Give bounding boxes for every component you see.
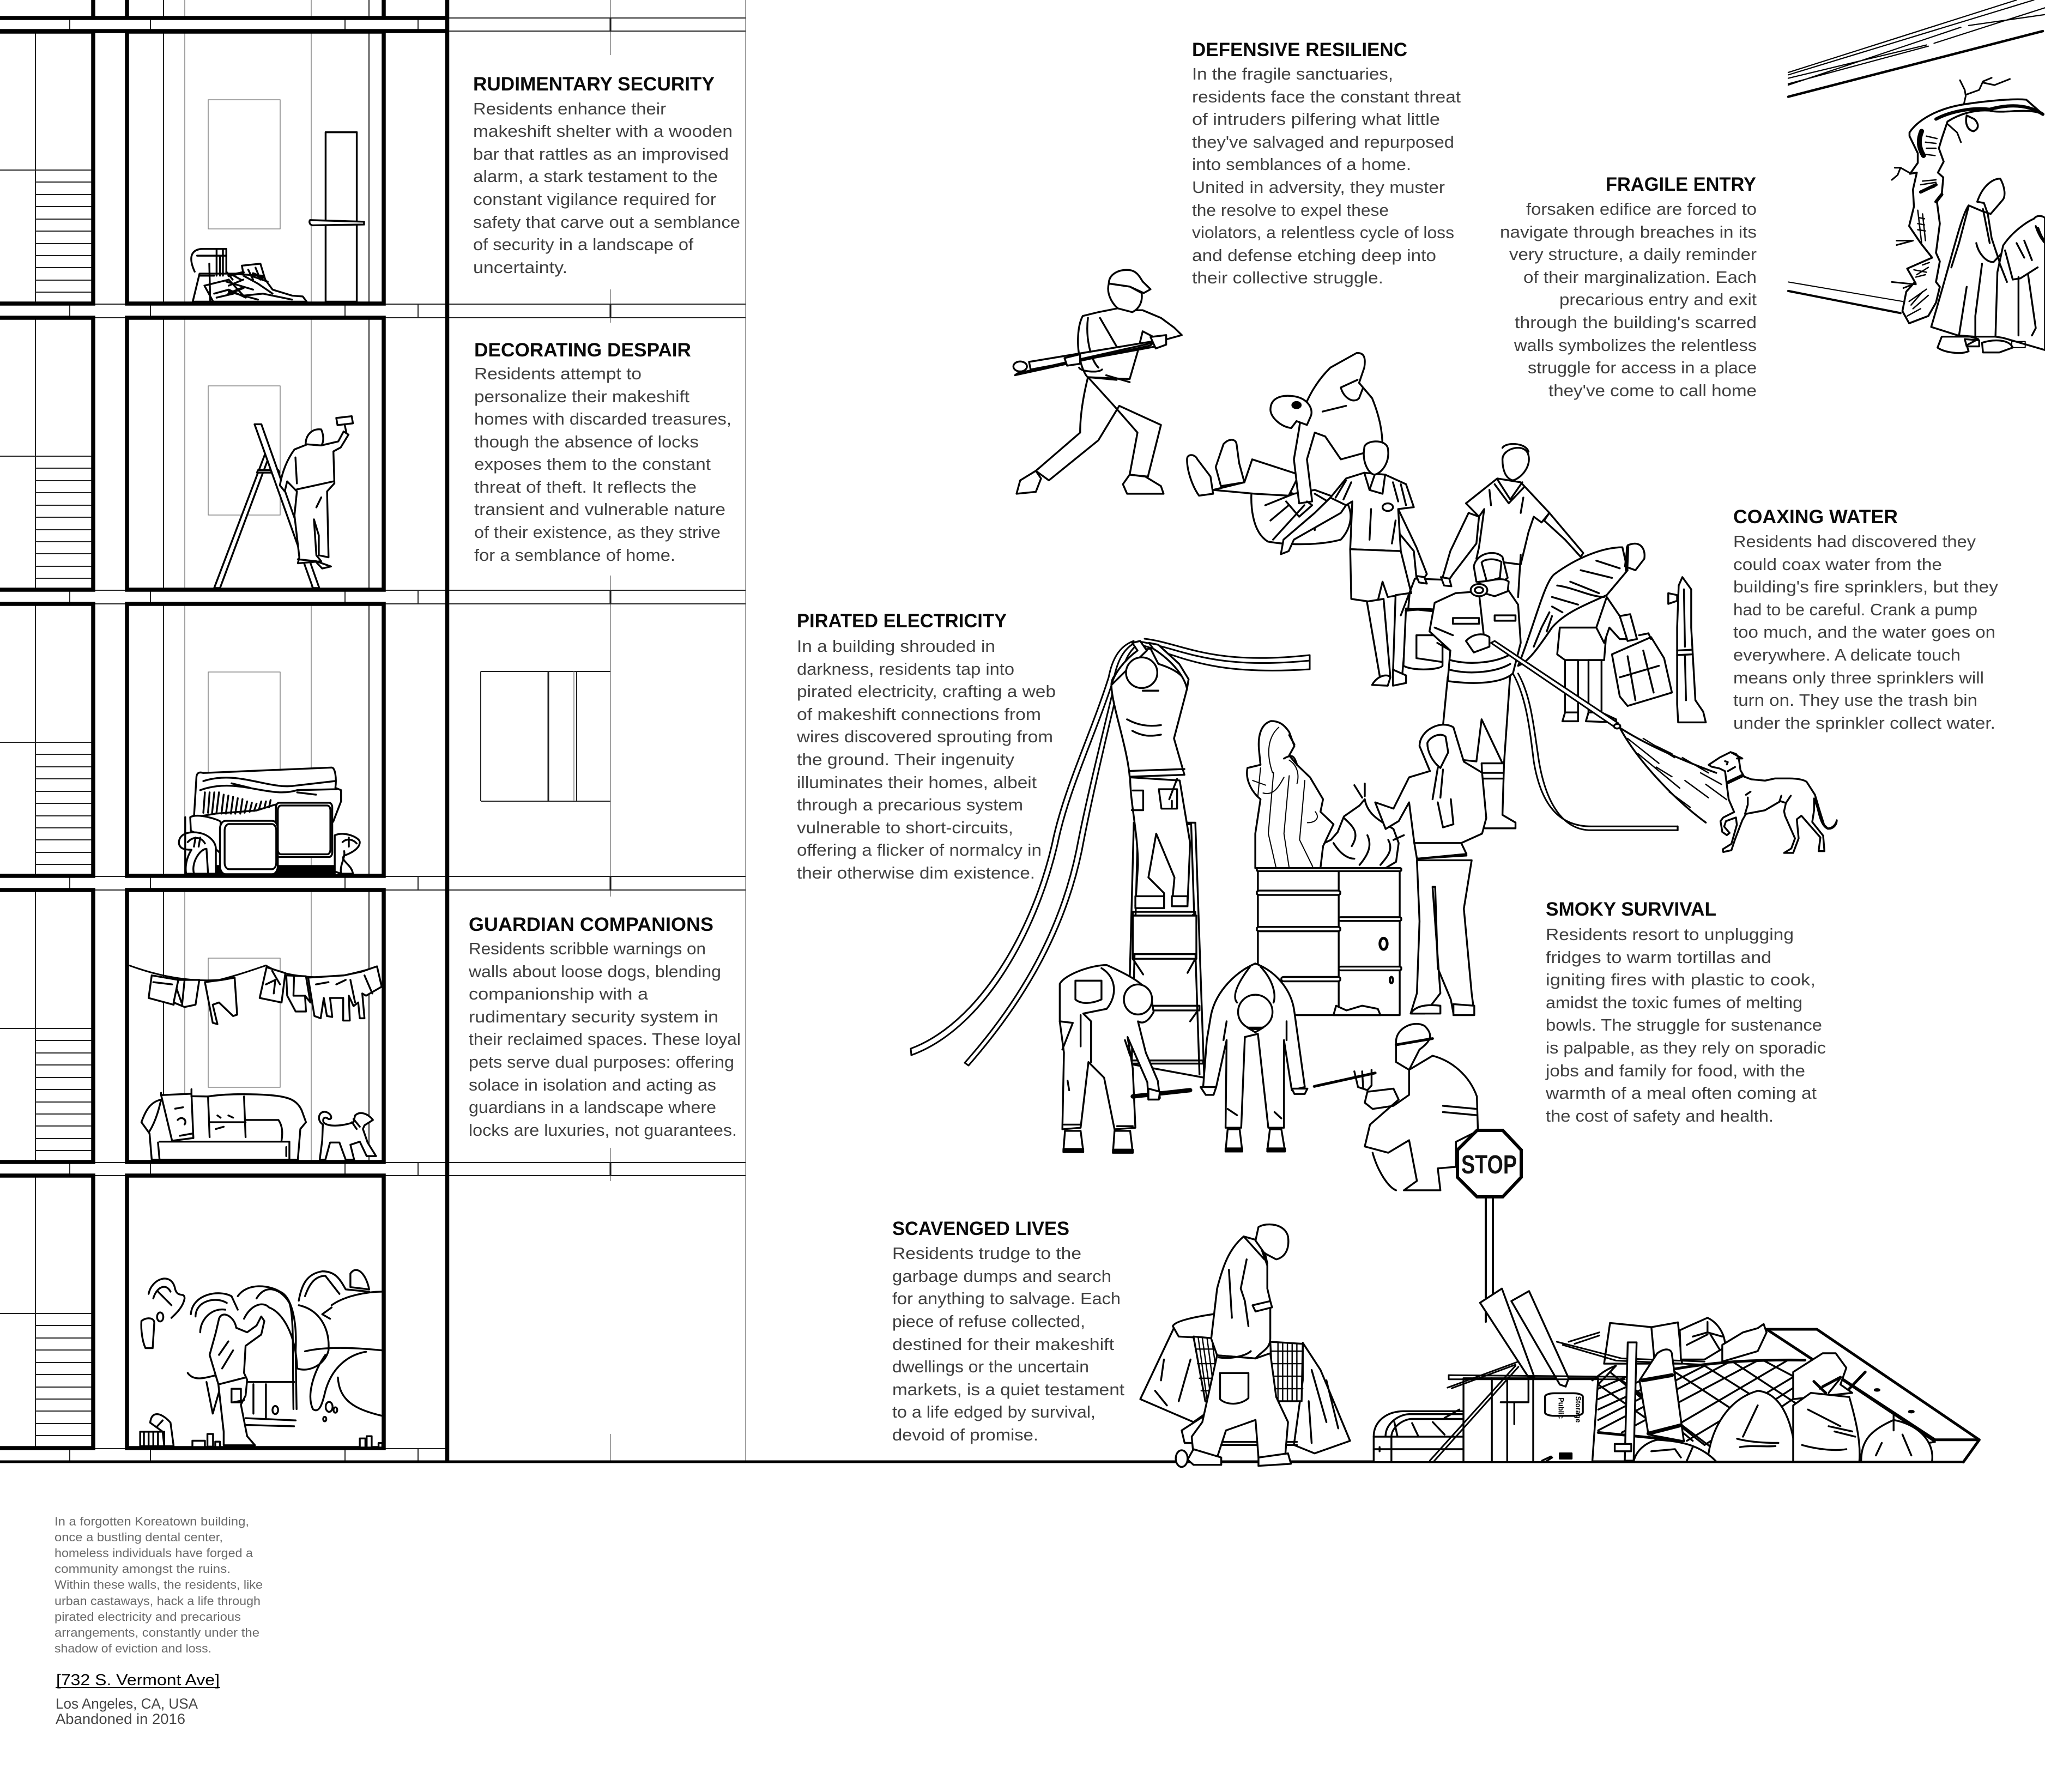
room 4: clothesline, sofa and dog (129, 965, 382, 1160)
heading: scavenged lives: SCAVENGED LIVES (892, 1218, 1069, 1239)
icon: pipes and paper (1557, 1318, 1766, 1365)
text block: pirated electricity: through a precarious system (797, 795, 1023, 814)
heading: guardian companions: GUARDIAN COMPANIONS (469, 914, 713, 935)
icon: chair and junk pile (191, 249, 307, 301)
text block: pirated electricity (796, 637, 1056, 882)
room 3: armchair, mattress and televisions (179, 767, 360, 875)
text block: decorating despair: threat of theft. It reflects the (474, 477, 697, 497)
text block: rudimentary security: makeshift shelter with a wooden (473, 122, 733, 141)
icon: crack in wall (1892, 78, 2043, 323)
intro paragraph: urban castaways, hack a life through (55, 1594, 261, 1608)
person in v-neck helping with bucket (1443, 444, 1583, 597)
text block: decorating despair (474, 364, 731, 565)
text block: coaxing water: Residents had discovered they (1733, 532, 1976, 551)
intro paragraph: arrangements, constantly under the (55, 1626, 259, 1639)
text block: coaxing water: under the sprinkler collect water. (1733, 713, 1995, 732)
text block: fragile entry: struggle for access in a place (1528, 358, 1757, 377)
icon: suitcase (1374, 1409, 1507, 1462)
top right: broken wall and figures (1788, 0, 2045, 353)
standpipe (1668, 577, 1706, 722)
electrician (1130, 777, 1190, 908)
text block: smoky survival: igniting fires with plastic to cook, (1546, 970, 1816, 989)
person pushing shopping cart with bags (1140, 1225, 1350, 1467)
text block: decorating despair: exposes them to the constant (474, 455, 711, 474)
text block: scavenged lives: dwellings or the uncertain (892, 1357, 1089, 1376)
text block: scavenged lives: markets, is a quiet testament (892, 1380, 1124, 1399)
text block: defensive resilience: United in adversity, they muster (1192, 178, 1445, 197)
icon: garbage bags (1633, 1353, 1932, 1462)
icon: left garbage bag (1140, 1313, 1217, 1422)
text block: fragile entry (1500, 199, 1757, 400)
text block: defensive resilience: their collective struggle. (1192, 268, 1383, 287)
text block: pirated electricity: the ground. Their ingenuity (797, 750, 1015, 769)
text block: pirated electricity: offering a flicker of normalcy in (797, 840, 1042, 859)
heading: pirated electricity: PIRATED ELECTRICITY (797, 610, 1007, 632)
location and status (56, 1696, 198, 1727)
intro paragraph (55, 1515, 263, 1655)
text block: rudimentary security (473, 99, 740, 277)
text block: defensive resilience: into semblances of a home. (1192, 155, 1411, 174)
person carrying bucket in polo shirt (1281, 441, 1427, 686)
text block: pirated electricity: pirated electricity, crafting a web (797, 682, 1056, 701)
text block: guardian companions: guardians in a landscape where (469, 1098, 716, 1117)
text block: scavenged lives: piece of refuse collected, (892, 1312, 1085, 1331)
text block: scavenged lives: for anything to salvage. Each (892, 1289, 1121, 1308)
heading: decorating despair: DECORATING DESPAIR (474, 340, 691, 361)
pressure wand and water spray (1466, 634, 1727, 822)
text block: defensive resilience: of intruders pilfering what little (1192, 110, 1440, 129)
text block: decorating despair: for a semblance of home. (474, 546, 675, 565)
intro paragraph: In a forgotten Koreatown building, (55, 1515, 249, 1528)
text block: scavenged lives: garbage dumps and search (892, 1267, 1111, 1286)
fallen man's legs and torso (1187, 440, 1351, 544)
intro paragraph: community amongst the ruins. (55, 1562, 231, 1576)
text block: coaxing water: turn on. They use the trash bin (1733, 691, 1977, 710)
text block: rudimentary security: Residents enhance their (473, 99, 666, 118)
text block: pirated electricity: In a building shrouded in (797, 637, 995, 656)
bent worker one with backpack (1060, 965, 1190, 1153)
text block: pirated electricity: wires discovered sprouting from (796, 727, 1053, 746)
text block: coaxing water: building's fire sprinklers, but they (1733, 577, 1999, 596)
icon: first robed figure (1931, 179, 2032, 353)
icon: door (325, 132, 357, 301)
text block: guardian companions: solace in isolation and acting as (469, 1075, 716, 1094)
text block: scavenged lives: Residents trudge to the (892, 1244, 1081, 1263)
icon: graffiti artist (210, 1315, 264, 1445)
intro paragraph: shadow of eviction and loss. (55, 1642, 211, 1655)
ground line (0, 1461, 1963, 1463)
text block: fragile entry: navigate through breaches in its (1500, 222, 1757, 241)
text block: scavenged lives: devoid of promise. (892, 1425, 1038, 1444)
text block: pirated electricity: darkness, residents tap into (797, 659, 1014, 679)
icon: chain-link net (1592, 1342, 1805, 1461)
heading: rudimentary security: RUDIMENTARY SECURITY (473, 74, 715, 95)
swinging man with bar (1013, 270, 1182, 494)
text block: pirated electricity: their otherwise dim existence. (797, 863, 1035, 882)
text block: smoky survival: amidst the toxic fumes of melting (1546, 993, 1802, 1012)
text block: rudimentary security: safety that carve out a semblance (473, 213, 740, 232)
room 1: door with wooden bar and junk pile (191, 132, 364, 301)
text block: rudimentary security: uncertainty. (473, 258, 567, 277)
text block: fragile entry: walls symbolizes the relentless (1514, 336, 1757, 355)
crouching worker with fork and face shield (1314, 1024, 1478, 1190)
text block: defensive resilience: residents face the constant threat (1192, 87, 1461, 106)
text block: coaxing water: too much, and the water goes on (1733, 622, 1995, 641)
text block: coaxing water: had to be careful. Crank a pump (1733, 600, 1977, 619)
text block: pirated electricity: illuminates their homes, albeit (797, 773, 1037, 792)
icon: clothesline with laundry (129, 965, 382, 1024)
text block: guardian companions: Residents scribble warnings on (469, 939, 706, 958)
text block: defensive resilience: violators, a relentless cycle of loss (1192, 223, 1454, 242)
text block: coaxing water: could coax water from the (1733, 555, 1942, 574)
text block: coaxing water: means only three sprinklers will (1733, 668, 1984, 687)
text block: rudimentary security: bar that rattles as an improvised (473, 144, 729, 164)
icon: shopper (1188, 1225, 1291, 1466)
person in hoodie warming hands (1375, 725, 1486, 1015)
text block: rudimentary security: constant vigilance required for (473, 190, 716, 209)
text block: guardian companions: locks are luxuries, not guarantees. (469, 1121, 737, 1140)
text block: fragile entry: precarious entry and exit (1559, 290, 1757, 309)
standing attacker leaning over (1270, 353, 1383, 517)
text block: decorating despair: transient and vulnerable nature (474, 500, 725, 519)
heading: defensive resilience: DEFENSIVE RESILIENC (1192, 39, 1407, 60)
stop sign (1457, 1130, 1521, 1322)
text block: scavenged lives (892, 1244, 1124, 1444)
wall perspective lines (1788, 0, 2045, 313)
wires (911, 639, 1310, 1065)
text block: defensive resilience: In the fragile sanctuaries, (1192, 64, 1393, 83)
text block: guardian companions (468, 939, 741, 1140)
icon: sofa (141, 1089, 306, 1160)
text block: smoky survival: fridges to warm tortillas and (1546, 948, 1771, 967)
text block: fragile entry: very structure, a daily reminder (1509, 245, 1757, 264)
burn barrels with fire (1257, 784, 1404, 1015)
falling man being pushed (1187, 353, 1383, 544)
text block: guardian companions: their reclaimed spaces. These loyal (469, 1030, 741, 1049)
icon: cardboard box with Public Storage label: Public (1557, 1397, 1565, 1419)
greyhound dog (1709, 752, 1837, 853)
icon: flames (1318, 784, 1404, 868)
icon: paint cans and supplies (140, 1414, 382, 1448)
icon: wooden security bar (310, 220, 364, 225)
bending woman with shawl carrying jug (1518, 544, 1672, 722)
icon: cardboard box with Public Storage label: Storage (1574, 1396, 1582, 1422)
scrap heap (1374, 1288, 1979, 1462)
intro paragraph: homeless individuals have forged a (55, 1546, 253, 1560)
icon: shopping cart (1176, 1336, 1303, 1467)
intro paragraph: pirated electricity and precarious (55, 1610, 241, 1624)
text block: smoky survival: jobs and family for food, with the (1545, 1061, 1805, 1080)
location and status: Abandoned in 2016 (56, 1711, 185, 1727)
text block: decorating despair: of their existence, as they strive (474, 523, 721, 542)
room 2: person painting on a ladder (214, 416, 353, 588)
text block: scavenged lives: destined for their makeshift (892, 1335, 1114, 1354)
stop sign: STOP (1461, 1151, 1517, 1179)
intro paragraph: once a bustling dental center, (55, 1530, 223, 1544)
heading: fragile entry: FRAGILE ENTRY (1606, 174, 1756, 195)
bucket (1401, 576, 1451, 669)
text block: scavenged lives: to a life edged by survival, (892, 1402, 1096, 1421)
text block: defensive resilience: they've salvaged and repurposed (1192, 132, 1454, 152)
text block: smoky survival: Residents resort to unplugging (1546, 925, 1794, 944)
heading: coaxing water: COAXING WATER (1733, 506, 1898, 528)
text block: guardian companions: walls about loose dogs, blending (468, 962, 721, 981)
icon: cardboard box with Public Storage label (1463, 1378, 1598, 1462)
text block: pirated electricity: vulnerable to short-circuits, (797, 818, 1013, 837)
text block: guardian companions: pets serve dual purposes: offering (469, 1052, 734, 1071)
icon: graffiti shapes (141, 1270, 382, 1426)
text block: smoky survival: bowls. The struggle for sustenance (1546, 1015, 1822, 1034)
icon: mattress (1766, 1329, 1979, 1462)
bent worker two facing forward (1201, 964, 1308, 1152)
icon: cardboard flaps (1430, 1288, 1625, 1461)
woman covering her mouth (1247, 721, 1334, 868)
intro paragraph: Within these walls, the residents, like (55, 1578, 263, 1591)
text block: guardian companions: rudimentary security system in (469, 1007, 718, 1026)
text block: smoky survival: is palpable, as they rely on sporadic (1546, 1038, 1826, 1057)
text block: fragile entry: forsaken edifice are forced to (1526, 199, 1757, 219)
electrician on ladder pulling wires (911, 639, 1310, 1077)
text block: fragile entry: through the building's scarred (1515, 313, 1757, 332)
text block: smoky survival: warmth of a meal often coming at (1545, 1083, 1817, 1103)
text block: defensive resilience: the resolve to expel these (1192, 201, 1389, 220)
text block: decorating despair: homes with discarded treasures, (474, 409, 731, 428)
text block: rudimentary security: of security in a landscape of (473, 235, 693, 254)
ladder (1128, 823, 1204, 1077)
text block: defensive resilience (1192, 64, 1461, 287)
text block: fragile entry: of their marginalization. Each (1523, 268, 1757, 287)
text block: coaxing water: everywhere. A delicate touch (1733, 645, 1961, 664)
text block: decorating despair: personalize their makeshift (474, 387, 689, 406)
water hose (1513, 674, 1678, 830)
text block: decorating despair: Residents attempt to (474, 364, 642, 383)
building section drawing (0, 0, 746, 1461)
text block: fragile entry: they've come to call home (1548, 381, 1757, 400)
text block: decorating despair: though the absence of locks (474, 432, 699, 451)
text block: coaxing water (1733, 532, 1999, 732)
text block: smoky survival: the cost of safety and health. (1546, 1106, 1774, 1125)
heading: smoky survival: SMOKY SURVIVAL (1546, 899, 1716, 920)
text block: defensive resilience: and defense etching deep into (1192, 246, 1436, 265)
room 5: person spray painting graffiti (140, 1270, 382, 1448)
text block: guardian companions: companionship with a (469, 984, 649, 1003)
icon: right garbage bag (1294, 1343, 1350, 1454)
text block: rudimentary security: alarm, a stark testament to the (473, 167, 718, 186)
location and status: Los Angeles, CA, USA (56, 1696, 198, 1712)
icon: guard dog (319, 1112, 376, 1160)
text block: smoky survival (1545, 925, 1826, 1125)
firefighter with respirator and pressure wand (1430, 553, 1521, 828)
icon: second bending robed figure (1965, 216, 2045, 353)
address: [732 S. Vermont Ave] (56, 1672, 220, 1689)
text block: pirated electricity: of makeshift connections from (797, 705, 1041, 724)
